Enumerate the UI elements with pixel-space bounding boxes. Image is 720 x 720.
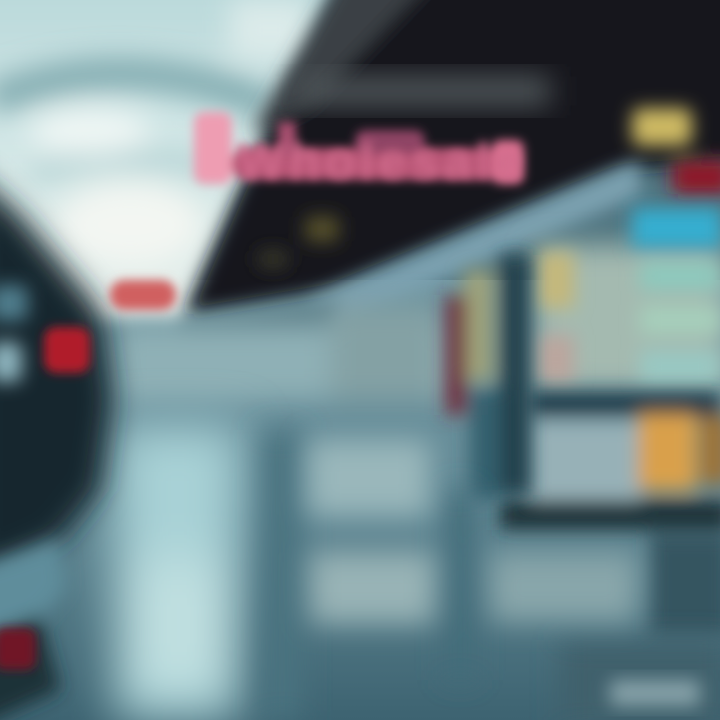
- store lower counter: [500, 392, 720, 635]
- pink sign: [194, 112, 524, 184]
- red lights: [0, 280, 176, 670]
- dark ceiling on the right: [185, 0, 720, 315]
- floor background: [0, 280, 720, 720]
- mid storefront band: [115, 305, 455, 400]
- floor panels: [308, 440, 638, 624]
- dark car at left: [0, 170, 112, 580]
- window displays: [538, 208, 720, 384]
- canopy beam: [180, 160, 640, 360]
- dark sign band: [300, 76, 550, 106]
- ceiling lights: [258, 108, 720, 268]
- roof arches: [0, 0, 310, 267]
- floor reflection left: [115, 425, 240, 720]
- floor vertical shadows: [262, 430, 720, 720]
- storefront pillars: [446, 255, 530, 500]
- glass roof sky: [0, 0, 350, 320]
- sign text: Wholesale: [238, 133, 522, 189]
- right store window: [535, 245, 720, 390]
- car windows and body: [0, 285, 65, 720]
- floor mark bottom right: [610, 680, 700, 706]
